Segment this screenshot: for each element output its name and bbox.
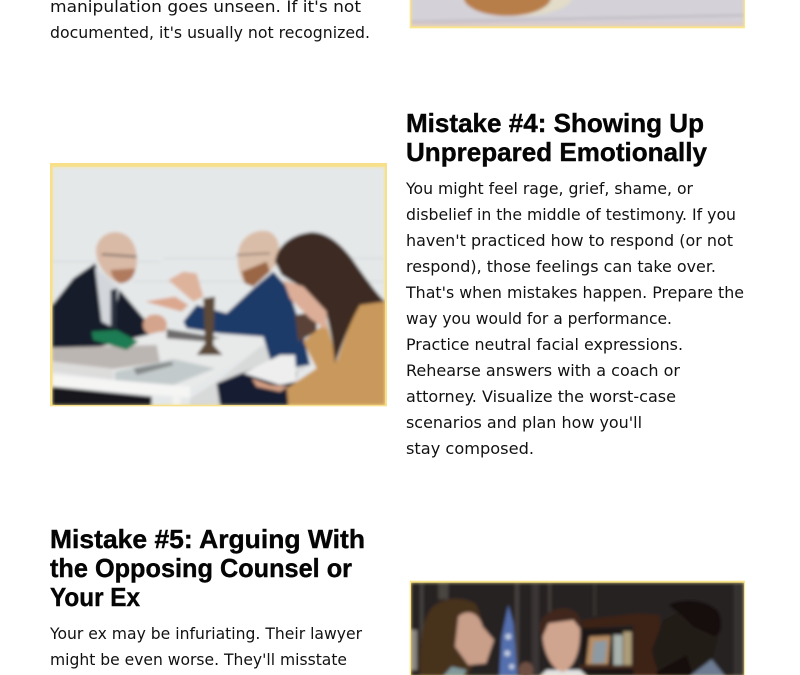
text block: mistake 4 body: way you would for a performance.	[406, 309, 672, 328]
table	[100, 330, 164, 349]
woman	[419, 599, 481, 675]
heading: mistake 5: the Opposing Counsel or	[50, 553, 352, 583]
text block: mistake 4 body: Practice neutral facial expressions.	[406, 335, 683, 354]
jacket	[287, 302, 385, 405]
text block: mistake 5 body	[49, 624, 362, 669]
photo frame	[50, 163, 387, 406]
binder	[52, 345, 160, 369]
woman's lap and pants	[217, 368, 297, 405]
heading: mistake 4: Unprepared Emotionally	[406, 137, 708, 167]
text block: mistake 4 body: respond), those feelings can take over.	[406, 257, 716, 276]
heading: mistake 5: Your Ex	[50, 582, 140, 612]
hair	[275, 232, 385, 363]
text block: end of mistake 3: documented, it's usually not recognized.	[50, 23, 370, 42]
photo: courtroom conversation	[410, 581, 745, 675]
text block: mistake 4 body: Rehearse answers with a coach or	[406, 361, 680, 380]
hands	[168, 272, 203, 302]
text block: mistake 4 body: scenarios and plan how you'll	[406, 413, 642, 432]
statue	[197, 297, 223, 355]
newspaper	[115, 359, 215, 385]
right man	[652, 610, 718, 675]
text block: mistake 4 body	[405, 179, 744, 458]
floor	[190, 345, 307, 405]
text block: mistake 4 body: attorney. Visualize the worst-case	[406, 387, 676, 406]
left man	[52, 263, 155, 352]
heading: mistake 5: Mistake #5: Arguing With	[50, 524, 365, 554]
heading: mistake 5	[50, 524, 365, 612]
photo: gavel base	[410, 0, 745, 28]
flag	[499, 605, 517, 675]
text block: mistake 4 body: haven't practiced how to respond (or not	[406, 231, 733, 250]
photo frame	[410, 581, 745, 675]
text block: mistake 4 body: You might feel rage, grief, shame, or	[405, 179, 693, 198]
text block: end of mistake 3	[50, 0, 370, 42]
text block: mistake 4 body: stay composed.	[406, 439, 534, 458]
photo: distressed woman with two lawyers	[50, 163, 387, 406]
text block: mistake 5 body: Your ex may be infuriating. Their lawyer	[49, 624, 362, 643]
hair behind hand	[295, 312, 317, 342]
heading: mistake 4	[406, 108, 708, 167]
text block: mistake 5 body: might be even worse. They'll misstate	[50, 650, 347, 669]
tissue	[243, 355, 297, 385]
background person	[519, 662, 533, 675]
text block: mistake 4 body: That's when mistakes happen. Prepare the	[405, 283, 744, 302]
right man	[183, 272, 310, 370]
heading: mistake 4: Mistake #4: Showing Up	[406, 108, 704, 138]
central man	[540, 670, 587, 675]
text block: mistake 4 body: disbelief in the middle of testimony. If you	[406, 205, 736, 224]
bookcase	[582, 613, 660, 675]
